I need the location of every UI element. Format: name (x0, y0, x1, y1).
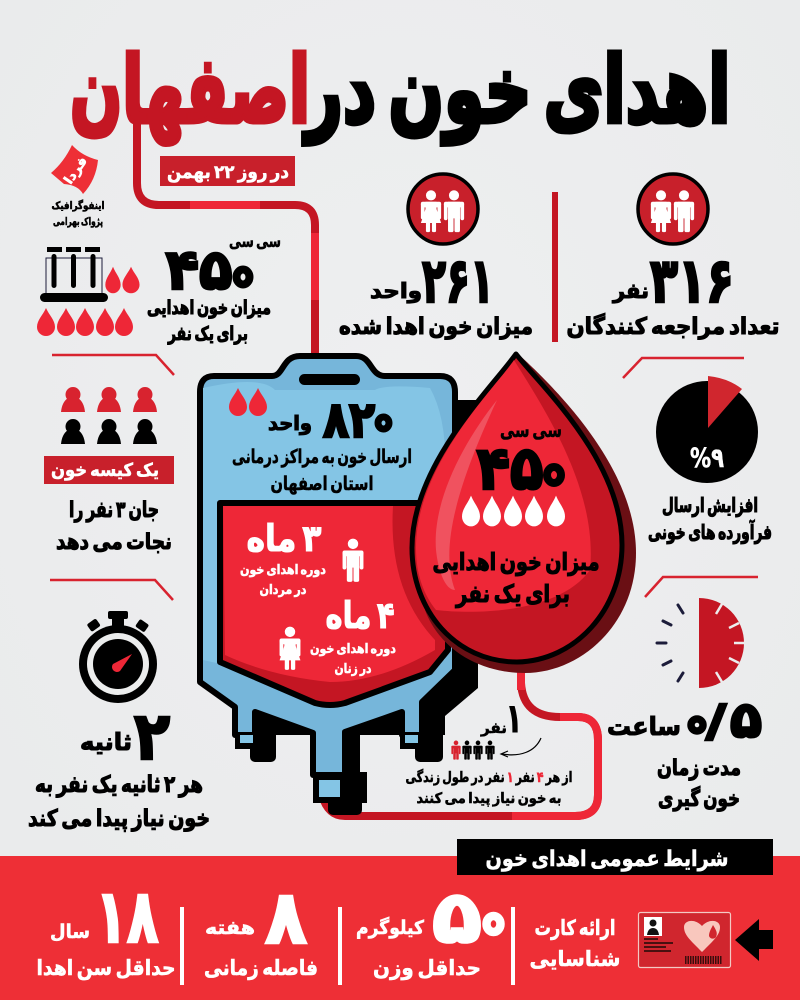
stat: 820 units: ۸۲ (323, 391, 375, 449)
stat: every 2 seconds (28, 698, 210, 832)
minimum interval: ۸ (265, 875, 307, 961)
four people icons (451, 741, 495, 760)
drop caption: میزان خون اهدایی (432, 548, 600, 576)
stat: 450 cc per person: برای یک نفر (167, 323, 248, 345)
minimum weight: ۵ (432, 875, 482, 959)
minimum weight: حداقل وزن (373, 956, 481, 980)
minimum weight: کیلوگرم (356, 916, 425, 939)
ID card text: ارائه کارت (534, 916, 616, 940)
saves three lives text (56, 498, 172, 555)
4 months, women: در زنان (334, 662, 372, 677)
ID card icon (638, 912, 730, 968)
pie caption: افزایش ارسال (662, 493, 758, 517)
number: ۲۶۱ (422, 244, 494, 317)
stat: every 2 seconds: خون نیاز پیدا می کند (28, 806, 210, 832)
icon: people in circle (408, 174, 478, 244)
blood bag (200, 356, 478, 815)
minimum age (36, 874, 176, 980)
3 months, men: در مردان (260, 583, 307, 598)
minimum interval (204, 875, 318, 980)
drop caption: برای یک نفر (455, 580, 570, 608)
port tips (235, 732, 422, 803)
icon: half hour clock (657, 598, 745, 688)
4 months, women (280, 594, 396, 677)
pie chart 9 percent: %۹ (690, 443, 724, 474)
stat: 820 units (232, 391, 412, 495)
drop shadow (425, 352, 636, 673)
ID card text: شناسایی (530, 947, 620, 971)
drops on bag (229, 388, 267, 416)
4 months, women: دوره اهدای خون (310, 642, 396, 657)
stat: 450 cc per person: ۰ (238, 267, 248, 288)
red fill panel (220, 503, 448, 705)
stat: 820 units: واحد (268, 411, 312, 435)
minimum age: سال (50, 921, 90, 943)
stat: half hour: ساعت (607, 712, 681, 741)
stat: 450 cc per person (147, 232, 281, 345)
stat: half hour: ۰ (692, 716, 702, 735)
stat: 450 cc per person: ۴۵ (166, 238, 232, 303)
stat: 1 person in 4: به خون نیاز پیدا می کنند (416, 791, 562, 807)
stat: 820 units: ارسال خون به مراکز درمانی (232, 446, 412, 468)
saves three lives text: جان ۳ نفر را (69, 498, 159, 523)
icon: people in circle (638, 174, 708, 244)
3 months, men: دوره اهدای خون (240, 563, 326, 578)
bag lighter area (203, 382, 445, 675)
stat: 316 visitors (566, 174, 780, 340)
date label: در روز ۲۲ بهمن (167, 162, 289, 183)
stat: 261 units (339, 174, 533, 340)
stat: 820 units: استان اصفهان (270, 473, 374, 495)
test tube icon (40, 247, 108, 302)
one blood bag label: یک کیسه خون (51, 460, 159, 481)
title: blood donation in Isfahan (70, 37, 730, 145)
4 months, women: ۴ ماه (326, 594, 394, 637)
top pipe (137, 120, 315, 360)
logo caption: پژواک بهرامی (53, 216, 103, 228)
drop caption (432, 548, 600, 608)
stat: half hour: مدت زمان (657, 756, 741, 781)
minimum interval: هفته (205, 917, 255, 939)
stat: 450 cc per person: میزان خون اهدایی (147, 297, 271, 319)
pie caption (648, 493, 772, 544)
stat: half hour (607, 691, 762, 812)
stat: half hour: ۵ (730, 691, 762, 749)
icon: stopwatch (79, 611, 157, 703)
bag shadow (230, 400, 478, 815)
3 months, men (240, 517, 363, 598)
conditions heading (457, 839, 773, 875)
minimum weight (356, 875, 500, 980)
arrow (501, 738, 541, 757)
stat: half hour: خون گیری (658, 785, 740, 812)
drop number: ۴۵ (476, 434, 544, 504)
one blood bag label (44, 456, 174, 484)
drop highlight (436, 400, 497, 590)
conditions heading: شرایط عمومی اهدای خون (486, 847, 728, 872)
logo caption: اینفوگرافیک (52, 199, 104, 212)
stat: 820 units: ۰ (378, 414, 388, 433)
unit: نفر (612, 279, 649, 303)
unit: نفر (480, 719, 507, 737)
ID card text (530, 916, 620, 971)
minimum weight: ۰ (488, 915, 498, 934)
lower pipe (322, 665, 598, 816)
drop bright area (416, 360, 591, 612)
date label (160, 156, 295, 186)
stat: 1 person in 4 (406, 696, 572, 807)
unit: واحد (370, 279, 422, 303)
people busts icon (61, 387, 157, 444)
stat: every 2 seconds: ۲ (134, 698, 170, 775)
red drops, lower row (37, 308, 133, 336)
3 months, men: ۳ ماه (246, 517, 322, 560)
minimum age: ۱۸ (96, 874, 158, 960)
drop number zero: ۰ (548, 465, 560, 486)
title red part: اصفهان (70, 37, 310, 145)
saves three lives text: نجات می دهد (56, 530, 172, 555)
stat: every 2 seconds: ثانیه (80, 728, 132, 756)
stat: every 2 seconds: هر ۲ ثانیه یک نفر به (35, 772, 203, 798)
logo (51, 145, 104, 228)
hanger slot (299, 374, 360, 385)
caption: از هر ۴ نفر ۱ نفر در طول زندگی (406, 768, 572, 786)
red drops, upper row (105, 267, 140, 293)
bag body (200, 356, 455, 775)
drop body (412, 354, 622, 662)
arrow pointing to card (735, 919, 773, 961)
divider between stats (552, 192, 558, 342)
pie chart 9 percent (656, 376, 758, 483)
caption: تعداد مراجعه کنندگان (566, 313, 780, 340)
white drops (462, 496, 565, 526)
number: ۳۱۶ (650, 244, 734, 317)
stat: half hour: / (706, 696, 727, 747)
panel: general conditions (0, 839, 800, 1000)
caption: میزان خون اهدا شده (339, 314, 533, 340)
logo: فردا (61, 154, 91, 187)
minimum interval: فاصله زمانی (204, 956, 318, 980)
drop text: cc: سی سی (500, 418, 562, 442)
corner lines (50, 355, 758, 600)
minimum age: حداقل سن اهدا (36, 956, 176, 980)
big blood drop (412, 352, 636, 673)
logo caption (52, 199, 104, 228)
stat: 450 cc per person: سی سی (229, 232, 281, 252)
number 1: ۱ (506, 696, 522, 742)
